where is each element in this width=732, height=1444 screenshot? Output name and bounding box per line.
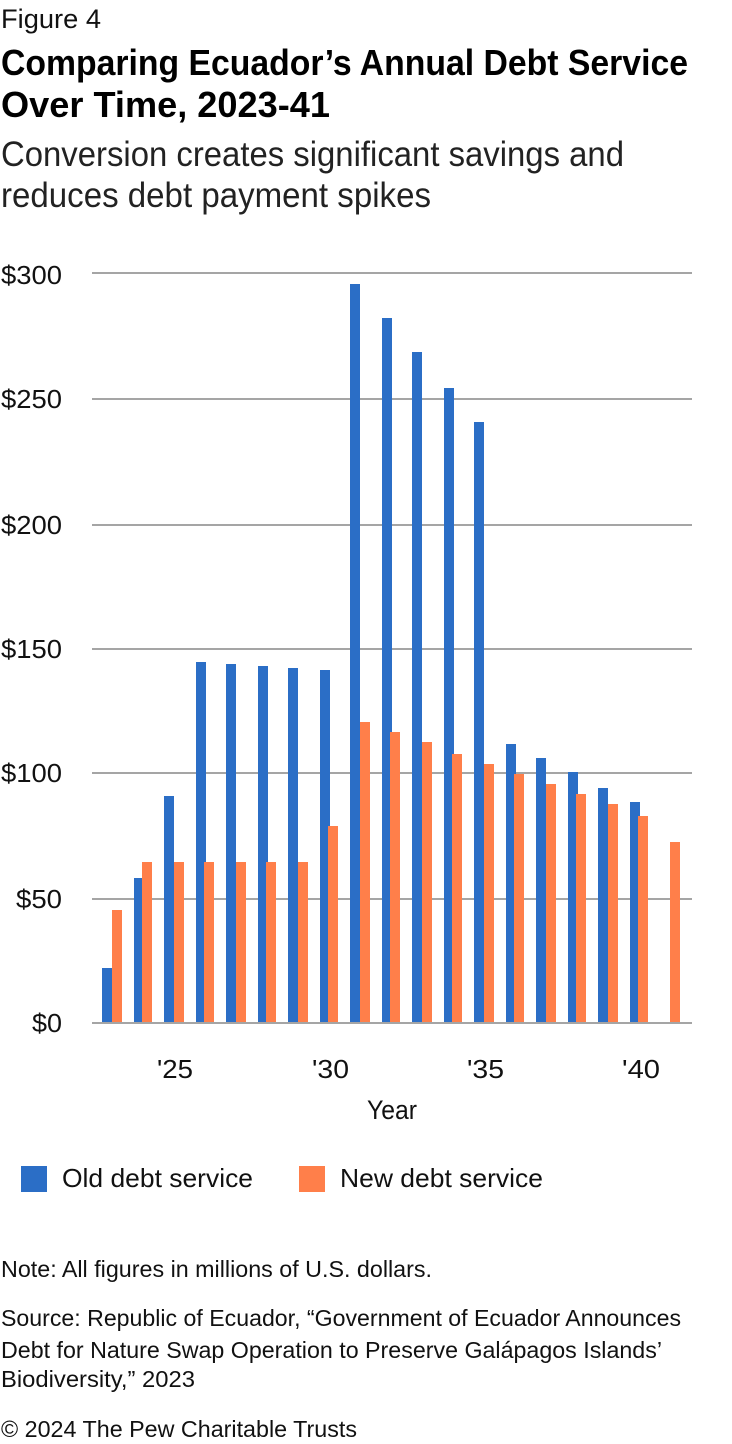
legend label: old debt service: Old debt service: [62, 1163, 253, 1193]
note: Note: All figures in millions of U.S. dollars.: [1, 1256, 432, 1282]
bar chart: [1, 260, 692, 1125]
figure label: Figure 4: [1, 4, 101, 34]
title: Comparing Ecuador’s Annual Debt Service: [1, 42, 688, 83]
source: [1, 1305, 681, 1392]
y-axis labels: $0: [32, 1008, 62, 1038]
y-axis labels: $100: [1, 758, 62, 788]
legend: [21, 1163, 543, 1193]
y-axis labels: $150: [1, 634, 62, 664]
subtitle: [1, 135, 624, 215]
legend label: new debt service: New debt service: [340, 1163, 543, 1193]
x-axis labels: [157, 1054, 660, 1084]
subtitle: Conversion creates significant savings and: [1, 135, 624, 174]
title: Over Time, 2023-41: [1, 84, 330, 125]
source: Biodiversity,” 2023: [1, 1366, 195, 1392]
y-axis labels: $50: [16, 884, 62, 914]
legend swatch: old debt service: [21, 1166, 47, 1192]
series: old debt service bars: [102, 284, 640, 1022]
x-axis labels: '35: [467, 1054, 504, 1084]
y-axis labels: $200: [1, 510, 62, 540]
subtitle: reduces debt payment spikes: [1, 176, 431, 215]
source: Debt for Nature Swap Operation to Preserve Galápagos Islands’: [1, 1337, 662, 1363]
series: new debt service bars: [112, 722, 680, 1022]
copyright: © 2024 The Pew Charitable Trusts: [1, 1416, 357, 1442]
legend swatch: new debt service: [299, 1166, 325, 1192]
x-axis labels: '30: [312, 1054, 349, 1084]
title: [1, 42, 688, 125]
source: Source: Republic of Ecuador, “Government of Ecuador Announces: [1, 1305, 681, 1331]
x-axis labels: '40: [622, 1054, 660, 1084]
y-axis labels: $300: [1, 260, 62, 290]
y-axis labels: [1, 260, 62, 1038]
x-axis title: Year: [367, 1095, 417, 1125]
y-axis labels: $250: [1, 384, 62, 414]
x-axis labels: '25: [157, 1054, 193, 1084]
